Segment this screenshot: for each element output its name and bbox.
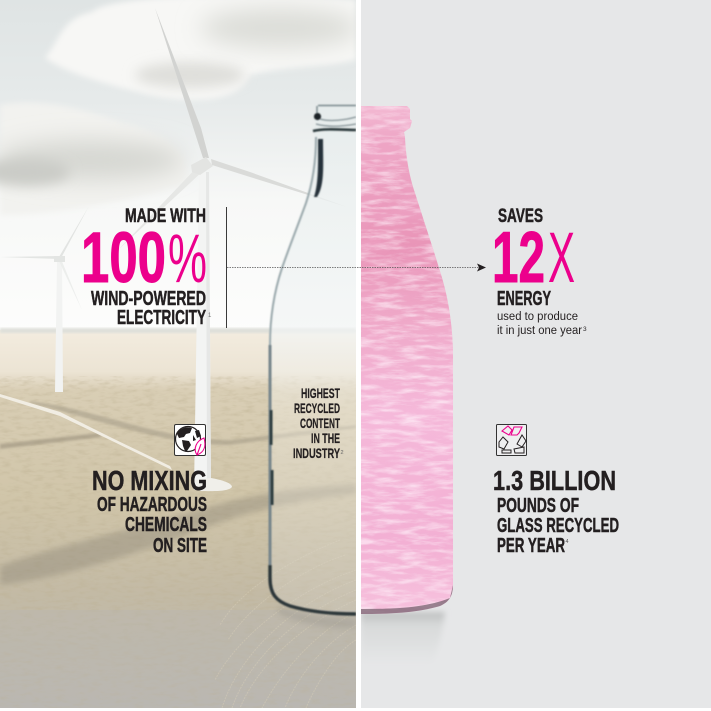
callout: no mixing of hazardous chemicals: CHEMICALS	[125, 514, 207, 536]
callout: made with 100% wind-powered electricity	[81, 205, 212, 329]
vertical rule and dotted connector arrow	[226, 207, 486, 328]
callout: no mixing of hazardous chemicals: OF HAZARDOUS	[97, 494, 207, 516]
panel: right grey background	[361, 0, 711, 708]
icon: globe with leaf	[174, 424, 206, 456]
text: highest recycled content in the industry: RECYCLED	[294, 400, 340, 416]
callout: made with 100% wind-powered electricity: ELECTRICITY	[117, 307, 206, 329]
text: highest recycled content in the industry: 2	[340, 450, 344, 456]
bottle: clear glass half	[269, 105, 356, 628]
callout: saves 12X energy: it in just one year	[497, 325, 582, 337]
bottle reflection on grey panel	[361, 612, 445, 665]
icon: recycling symbol	[496, 424, 526, 456]
callout: no mixing of hazardous chemicals	[92, 465, 207, 557]
callout: 1.3 billion pounds of glass recycled: 1.3 BILLION	[493, 465, 616, 496]
callout: no mixing of hazardous chemicals: NO MIXING	[92, 465, 207, 496]
callout: no mixing of hazardous chemicals: ON SITE	[153, 535, 207, 557]
callout: made with 100% wind-powered electricity: 1	[208, 313, 212, 319]
background panel: left wind farm photo	[0, 0, 360, 708]
callout: made with 100% wind-powered electricity: MADE WITH	[125, 205, 206, 227]
callout: 1.3 billion pounds of glass recycled	[493, 465, 619, 557]
callout: saves 12X energy: ENERGY	[497, 288, 551, 310]
text: highest recycled content in the industry	[293, 385, 344, 461]
callout: saves 12X energy: SAVES	[498, 205, 543, 227]
white divider strip	[356, 0, 361, 711]
callout: made with 100% wind-powered electricity: %	[168, 220, 207, 297]
field	[0, 328, 356, 708]
wind turbine: small	[6, 210, 86, 392]
callout: 1.3 billion pounds of glass recycled: PER YEAR	[497, 535, 565, 557]
bottle: pink fiberglass half	[361, 106, 453, 614]
text: highest recycled content in the industry: CONTENT	[300, 415, 340, 431]
callout: 1.3 billion pounds of glass recycled: 4	[566, 539, 569, 545]
callout: 1.3 billion pounds of glass recycled: POUNDS OF	[497, 495, 579, 517]
text: highest recycled content in the industry: INDUSTRY	[293, 445, 340, 461]
text: highest recycled content in the industry: HIGHEST	[301, 385, 340, 401]
callout: saves 12X energy: 3	[583, 326, 587, 333]
callout: 1.3 billion pounds of glass recycled: GLASS RECYCLED	[497, 515, 619, 537]
callout: saves 12X energy	[492, 205, 587, 337]
callout: saves 12X energy: 12	[492, 218, 545, 298]
callout: saves 12X energy: X	[548, 219, 575, 298]
callout: made with 100% wind-powered electricity: WIND-POWERED	[91, 288, 206, 310]
clouds	[0, 0, 360, 215]
callout: saves 12X energy: used to produce	[497, 311, 578, 323]
callout: made with 100% wind-powered electricity: 100	[81, 219, 166, 298]
wind turbine: large	[120, 10, 308, 492]
text: highest recycled content in the industry: IN THE	[311, 430, 340, 446]
